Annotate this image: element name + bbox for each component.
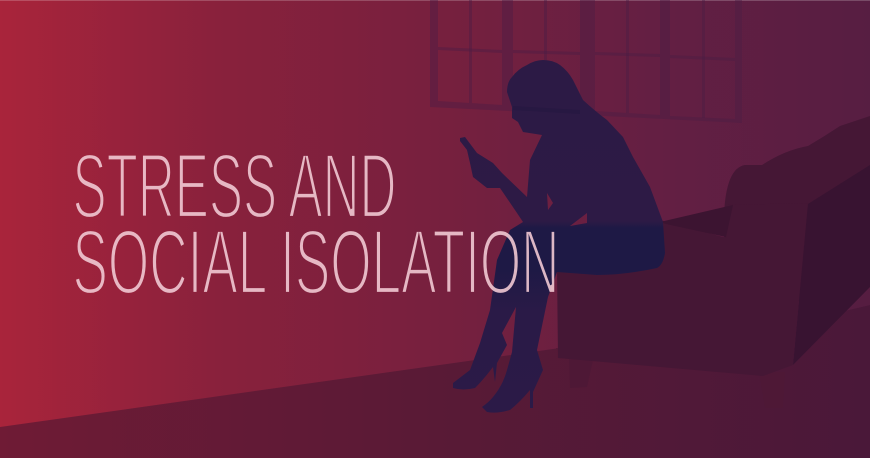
title — [76, 155, 554, 293]
faint window bar across the head — [513, 106, 580, 114]
sofa side in shadow — [793, 165, 870, 365]
floor — [0, 348, 560, 458]
dark cushion — [660, 205, 733, 237]
window — [430, 0, 742, 123]
woman silhouette looking at phone — [453, 60, 665, 413]
floor right of the sofa — [556, 305, 870, 458]
sofa back — [724, 116, 870, 300]
sofa arm and front — [557, 203, 808, 376]
sofa legs — [569, 355, 785, 408]
sofa — [557, 116, 870, 408]
wall strip behind the sofa side — [793, 287, 870, 365]
title line 1: STRESS AND — [72, 136, 396, 238]
